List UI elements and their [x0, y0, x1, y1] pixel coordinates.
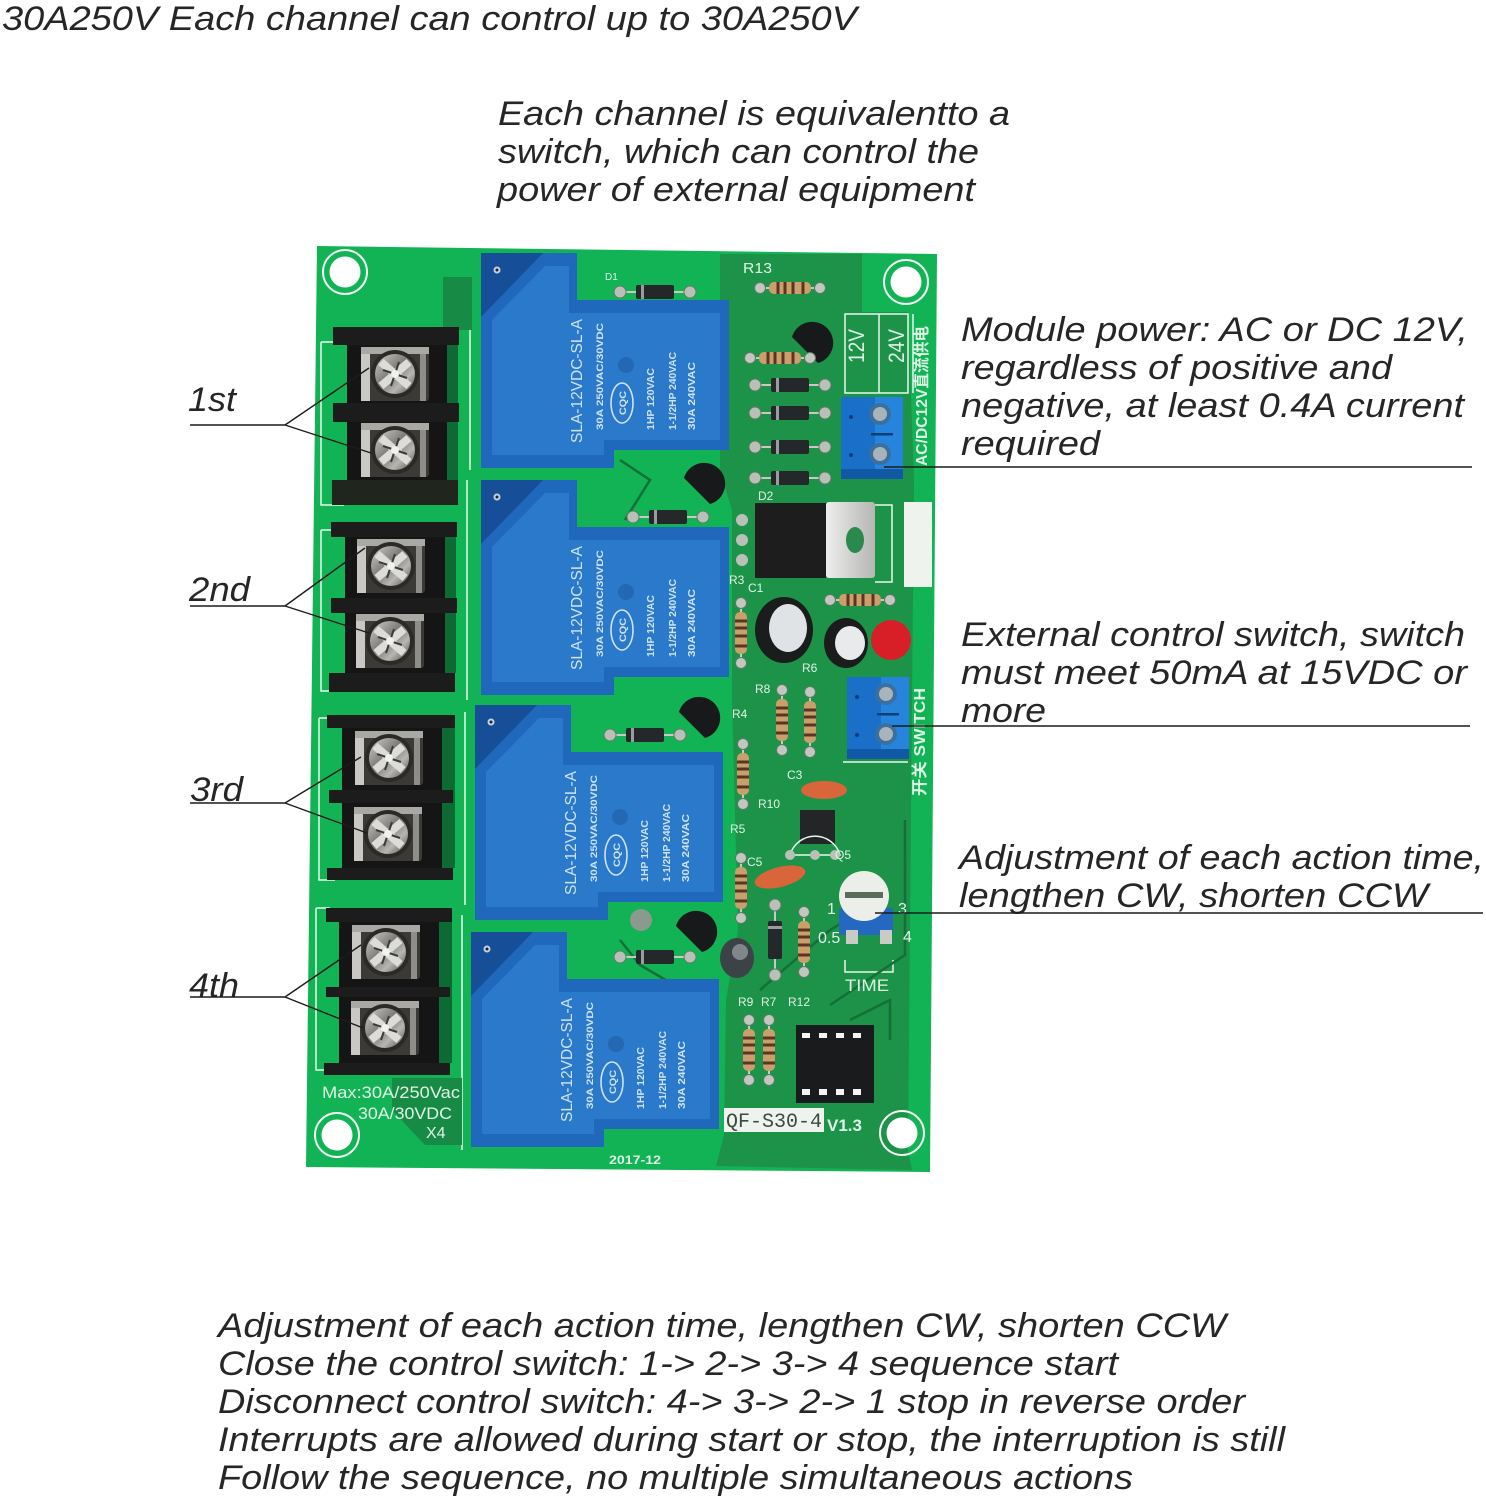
board silkscreen labels: 3 — [898, 901, 907, 918]
callout: module power: negative, at least 0.4A current — [961, 387, 1466, 425]
board silkscreen labels: D2 — [758, 489, 774, 503]
callout: external control switch — [892, 616, 1470, 730]
board silkscreen labels: 4 — [903, 929, 912, 946]
callout: action time adjustment: lengthen CW, shorten CCW — [959, 877, 1432, 915]
capacitors and LED — [720, 597, 911, 978]
board silkscreen labels: 0.5 — [818, 930, 840, 947]
text block: operating notes: Adjustment of each action time, lengthen CW, shorten CCW — [216, 1307, 1230, 1345]
callout: external control switch: must meet 50mA at 15VDC or — [961, 654, 1469, 692]
board silkscreen labels: Q5 — [835, 848, 851, 862]
relay 4 — [471, 932, 719, 1147]
input resistors and rectifier diodes — [735, 282, 896, 1086]
relay 3 — [475, 705, 723, 920]
text block: operating notes: Follow the sequence, no multiple simultaneous actions — [218, 1459, 1133, 1497]
relay 2 — [481, 480, 729, 695]
terminal block: channel 3 — [327, 715, 455, 880]
heading: channel description: switch, which can control the — [498, 133, 979, 171]
board silkscreen labels: R5 — [730, 822, 746, 836]
text block: operating notes: Close the control switch: 1-> 2-> 3-> 4 sequence start — [218, 1345, 1120, 1383]
callout: external control switch: more — [961, 692, 1046, 730]
text block: operating notes: Disconnect control switch: 4-> 3-> 2-> 1 stop in reverse order — [218, 1383, 1247, 1421]
dark silk patches — [392, 277, 472, 1145]
MOSFET Q5 — [785, 810, 840, 860]
mounting holes — [315, 250, 928, 1157]
terminal block: channel 1 — [332, 327, 459, 505]
flyback diodes and driver transistors — [604, 285, 833, 964]
board silkscreen labels: C1 — [748, 581, 764, 595]
board silkscreen labels — [322, 260, 931, 1167]
control switch terminal — [847, 677, 909, 759]
heading: channel description — [496, 95, 1010, 209]
terminal block: channel 4 — [324, 908, 452, 1075]
white header strip — [904, 502, 932, 587]
board silkscreen labels: R10 — [758, 797, 780, 811]
terminal shadows — [439, 345, 458, 1063]
board silkscreen labels: QF-S30-4 — [726, 1111, 822, 1134]
callout: external control switch: External control switch, switch — [961, 616, 1465, 654]
board silkscreen labels: R3 — [729, 573, 745, 587]
callout: module power: Module power: AC or DC 12V, — [961, 311, 1468, 349]
board silkscreen labels: R12 — [788, 995, 810, 1009]
callout: module power: regardless of positive and — [961, 349, 1394, 387]
callout: module power: required — [961, 425, 1102, 463]
panel: relay circuit board — [306, 246, 937, 1172]
board silkscreen labels: AC/DC12V直流供电 — [912, 326, 931, 466]
board silkscreen labels: 30A/30VDC — [358, 1104, 452, 1123]
board substrate — [306, 246, 937, 1172]
board silkscreen and traces — [316, 277, 913, 1150]
text block: operating notes — [216, 1307, 1286, 1497]
relay 1 — [481, 253, 729, 468]
channel label: 3rd with leader — [190, 757, 367, 833]
board silkscreen labels: Max:30A/250Vac — [322, 1083, 461, 1102]
board silkscreen labels: D1 — [605, 272, 618, 283]
channel label: 1st with leader — [188, 368, 371, 453]
callout: module power — [884, 311, 1472, 467]
board silkscreen labels: R8 — [755, 682, 771, 696]
board silkscreen labels: C3 — [787, 768, 803, 782]
board silkscreen labels: 1 — [827, 901, 836, 918]
heading: channel description: Each channel is equivalentto a — [498, 95, 1010, 133]
text block: operating notes: Interrupts are allowed during start or stop, the interruption is still — [218, 1421, 1286, 1459]
board silkscreen labels: 24V — [884, 329, 909, 363]
channel label: 3rd with leader: 3rd — [190, 771, 245, 809]
channel label: 2nd with leader: 2nd — [188, 571, 252, 609]
board silkscreen labels: 12V — [844, 329, 869, 363]
title: rating line: 30A250V Each channel can control up to 30A250V — [2, 0, 860, 38]
board silkscreen labels: V1.3 — [827, 1116, 862, 1135]
terminal block: channel 2 — [329, 522, 457, 692]
callout: action time adjustment — [875, 839, 1484, 915]
board silkscreen labels: R6 — [802, 661, 818, 675]
board silkscreen labels: 开关 SWITCH — [910, 688, 929, 796]
voltage regulator — [736, 502, 875, 578]
channel label: 4th with leader — [189, 945, 363, 1028]
board silkscreen labels: TIME — [845, 976, 889, 995]
channel label: 1st with leader: 1st — [188, 381, 237, 419]
power input terminal — [841, 397, 903, 479]
board silkscreen labels: R4 — [732, 707, 748, 721]
board silkscreen labels: C5 — [747, 855, 763, 869]
channel label: 4th with leader: 4th — [189, 967, 239, 1005]
darker control circuit area — [716, 254, 914, 1170]
callout: action time adjustment: Adjustment of each action time, — [957, 839, 1484, 877]
board silkscreen labels: R9 — [738, 995, 754, 1009]
IC U2 — [796, 1025, 874, 1103]
board silkscreen labels: X4 — [426, 1125, 446, 1142]
time adjustment trimmer — [839, 871, 893, 944]
board silkscreen labels: R7 — [761, 995, 777, 1009]
channel label: 2nd with leader — [188, 548, 369, 633]
board silkscreen labels: 2017-12 — [609, 1153, 661, 1167]
heading: channel description: power of external equipment — [496, 171, 977, 209]
board silkscreen labels: R13 — [743, 260, 772, 277]
